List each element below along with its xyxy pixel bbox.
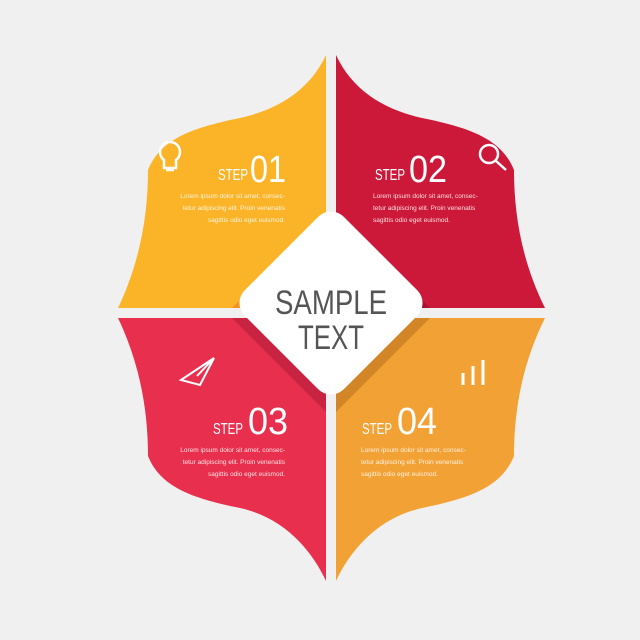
heading: step 02: 02 — [409, 149, 447, 191]
text: step 02 body — [373, 193, 478, 224]
text: step 03 body: sagittis odio eget euismod. — [208, 471, 285, 478]
text: step 01 body — [180, 193, 286, 224]
text: step 01 body: tetur adipiscing elit. Proin venenatis — [183, 205, 286, 212]
heading: step 01 — [218, 149, 286, 191]
title: sample text — [275, 284, 387, 357]
text: step 03 body: tetur adipiscing elit. Proin venenatis — [183, 459, 286, 466]
heading: step 01: 01 — [250, 149, 286, 191]
heading: step 02: STEP — [375, 167, 405, 184]
text: step 02 body: Lorem ipsum dolor sit amet, consec- — [373, 193, 478, 200]
text: step 03 body — [180, 447, 286, 478]
heading: step 01: STEP — [218, 167, 248, 184]
center diamond — [232, 204, 430, 402]
text: step 04 body — [361, 447, 466, 478]
heading: step 04: 04 — [397, 401, 437, 443]
text: step 04 body: tetur adipiscing elit. Proin venenatis — [361, 459, 464, 466]
text: step 02 body: sagittis odio eget euismod. — [373, 217, 450, 224]
heading: step 04 — [362, 401, 437, 443]
heading: step 03: 03 — [248, 401, 288, 443]
heading: step 03: STEP — [213, 421, 243, 438]
heading: step 04: STEP — [362, 421, 392, 438]
panel: step 04 — [336, 318, 545, 581]
text: step 04 body: sagittis odio eget euismod. — [361, 471, 438, 478]
text: step 03 body: Lorem ipsum dolor sit amet, consec- — [180, 447, 285, 454]
panel: step 02 — [336, 55, 545, 308]
icon: light bulb — [160, 142, 180, 170]
text: step 01 body: Lorem ipsum dolor sit amet, consec- — [180, 193, 285, 200]
icon: paper plane — [181, 358, 214, 385]
text: step 04 body: Lorem ipsum dolor sit amet, consec- — [361, 447, 466, 454]
text: step 02 body: tetur adipiscing elit. Proin venenatis — [373, 205, 476, 212]
panel: step 01 — [118, 55, 326, 308]
text: step 01 body: sagittis odio eget euismod. — [208, 217, 285, 224]
title: sample text: TEXT — [298, 319, 364, 357]
icon: bars — [463, 360, 483, 385]
icon: magnifier — [480, 145, 506, 170]
panel: step 03 — [118, 318, 326, 581]
heading: step 02 — [375, 149, 447, 191]
heading: step 03 — [213, 401, 288, 443]
shadow bands — [232, 214, 430, 412]
title: sample text: SAMPLE — [275, 284, 387, 322]
